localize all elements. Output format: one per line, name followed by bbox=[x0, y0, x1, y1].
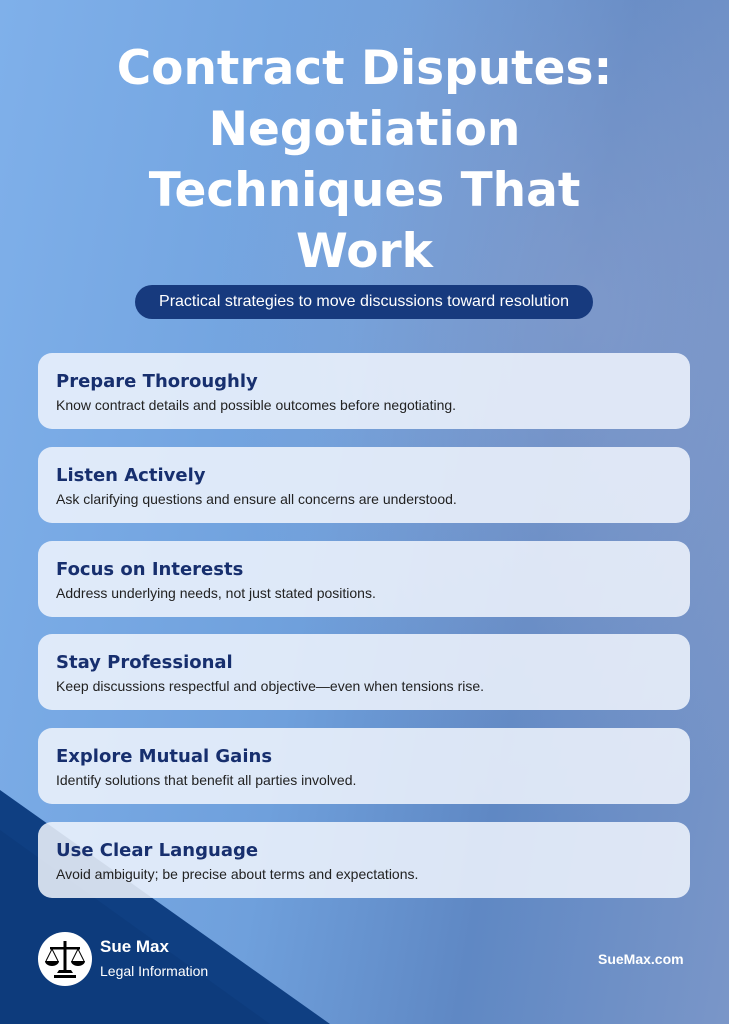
card: interests: Address underlying needs, not just stated positions. bbox=[56, 585, 376, 601]
card: clear language: Avoid ambiguity; be precise about terms and expectations. bbox=[56, 866, 418, 882]
card: prepare bbox=[38, 353, 690, 429]
card: mutual gains: Identify solutions that benefit all parties involved. bbox=[56, 772, 356, 788]
card: listen: Ask clarifying questions and ensure all concerns are understood. bbox=[56, 491, 457, 507]
brand text: Legal Information bbox=[100, 963, 208, 979]
title: Contract Disputes: bbox=[117, 41, 612, 96]
card: professional: Keep discussions respectful and objective—even when tensions rise. bbox=[56, 678, 484, 694]
title bbox=[117, 41, 612, 279]
card: prepare: Prepare Thoroughly bbox=[56, 371, 258, 392]
card: professional bbox=[38, 634, 690, 710]
subtitle pill bbox=[135, 285, 593, 319]
card: clear language bbox=[38, 822, 690, 898]
card: mutual gains: Explore Mutual Gains bbox=[56, 746, 272, 767]
title: Techniques That bbox=[149, 163, 580, 218]
card: listen bbox=[38, 447, 690, 523]
card: interests: Focus on Interests bbox=[56, 559, 243, 580]
title: Negotiation bbox=[209, 102, 520, 157]
card: clear language: Use Clear Language bbox=[56, 840, 258, 861]
brand text: Sue Max bbox=[100, 937, 169, 956]
card: mutual gains bbox=[38, 728, 690, 804]
title: Work bbox=[296, 224, 433, 279]
website: SueMax.com bbox=[598, 951, 684, 967]
subtitle pill: Practical strategies to move discussions toward resolution bbox=[159, 293, 569, 310]
card: listen: Listen Actively bbox=[56, 465, 205, 486]
card: prepare: Know contract details and possible outcomes before negotiating. bbox=[56, 397, 456, 413]
brand text bbox=[100, 937, 208, 979]
card: interests bbox=[38, 541, 690, 617]
icon: scales logo bbox=[38, 932, 92, 986]
card: professional: Stay Professional bbox=[56, 652, 233, 673]
